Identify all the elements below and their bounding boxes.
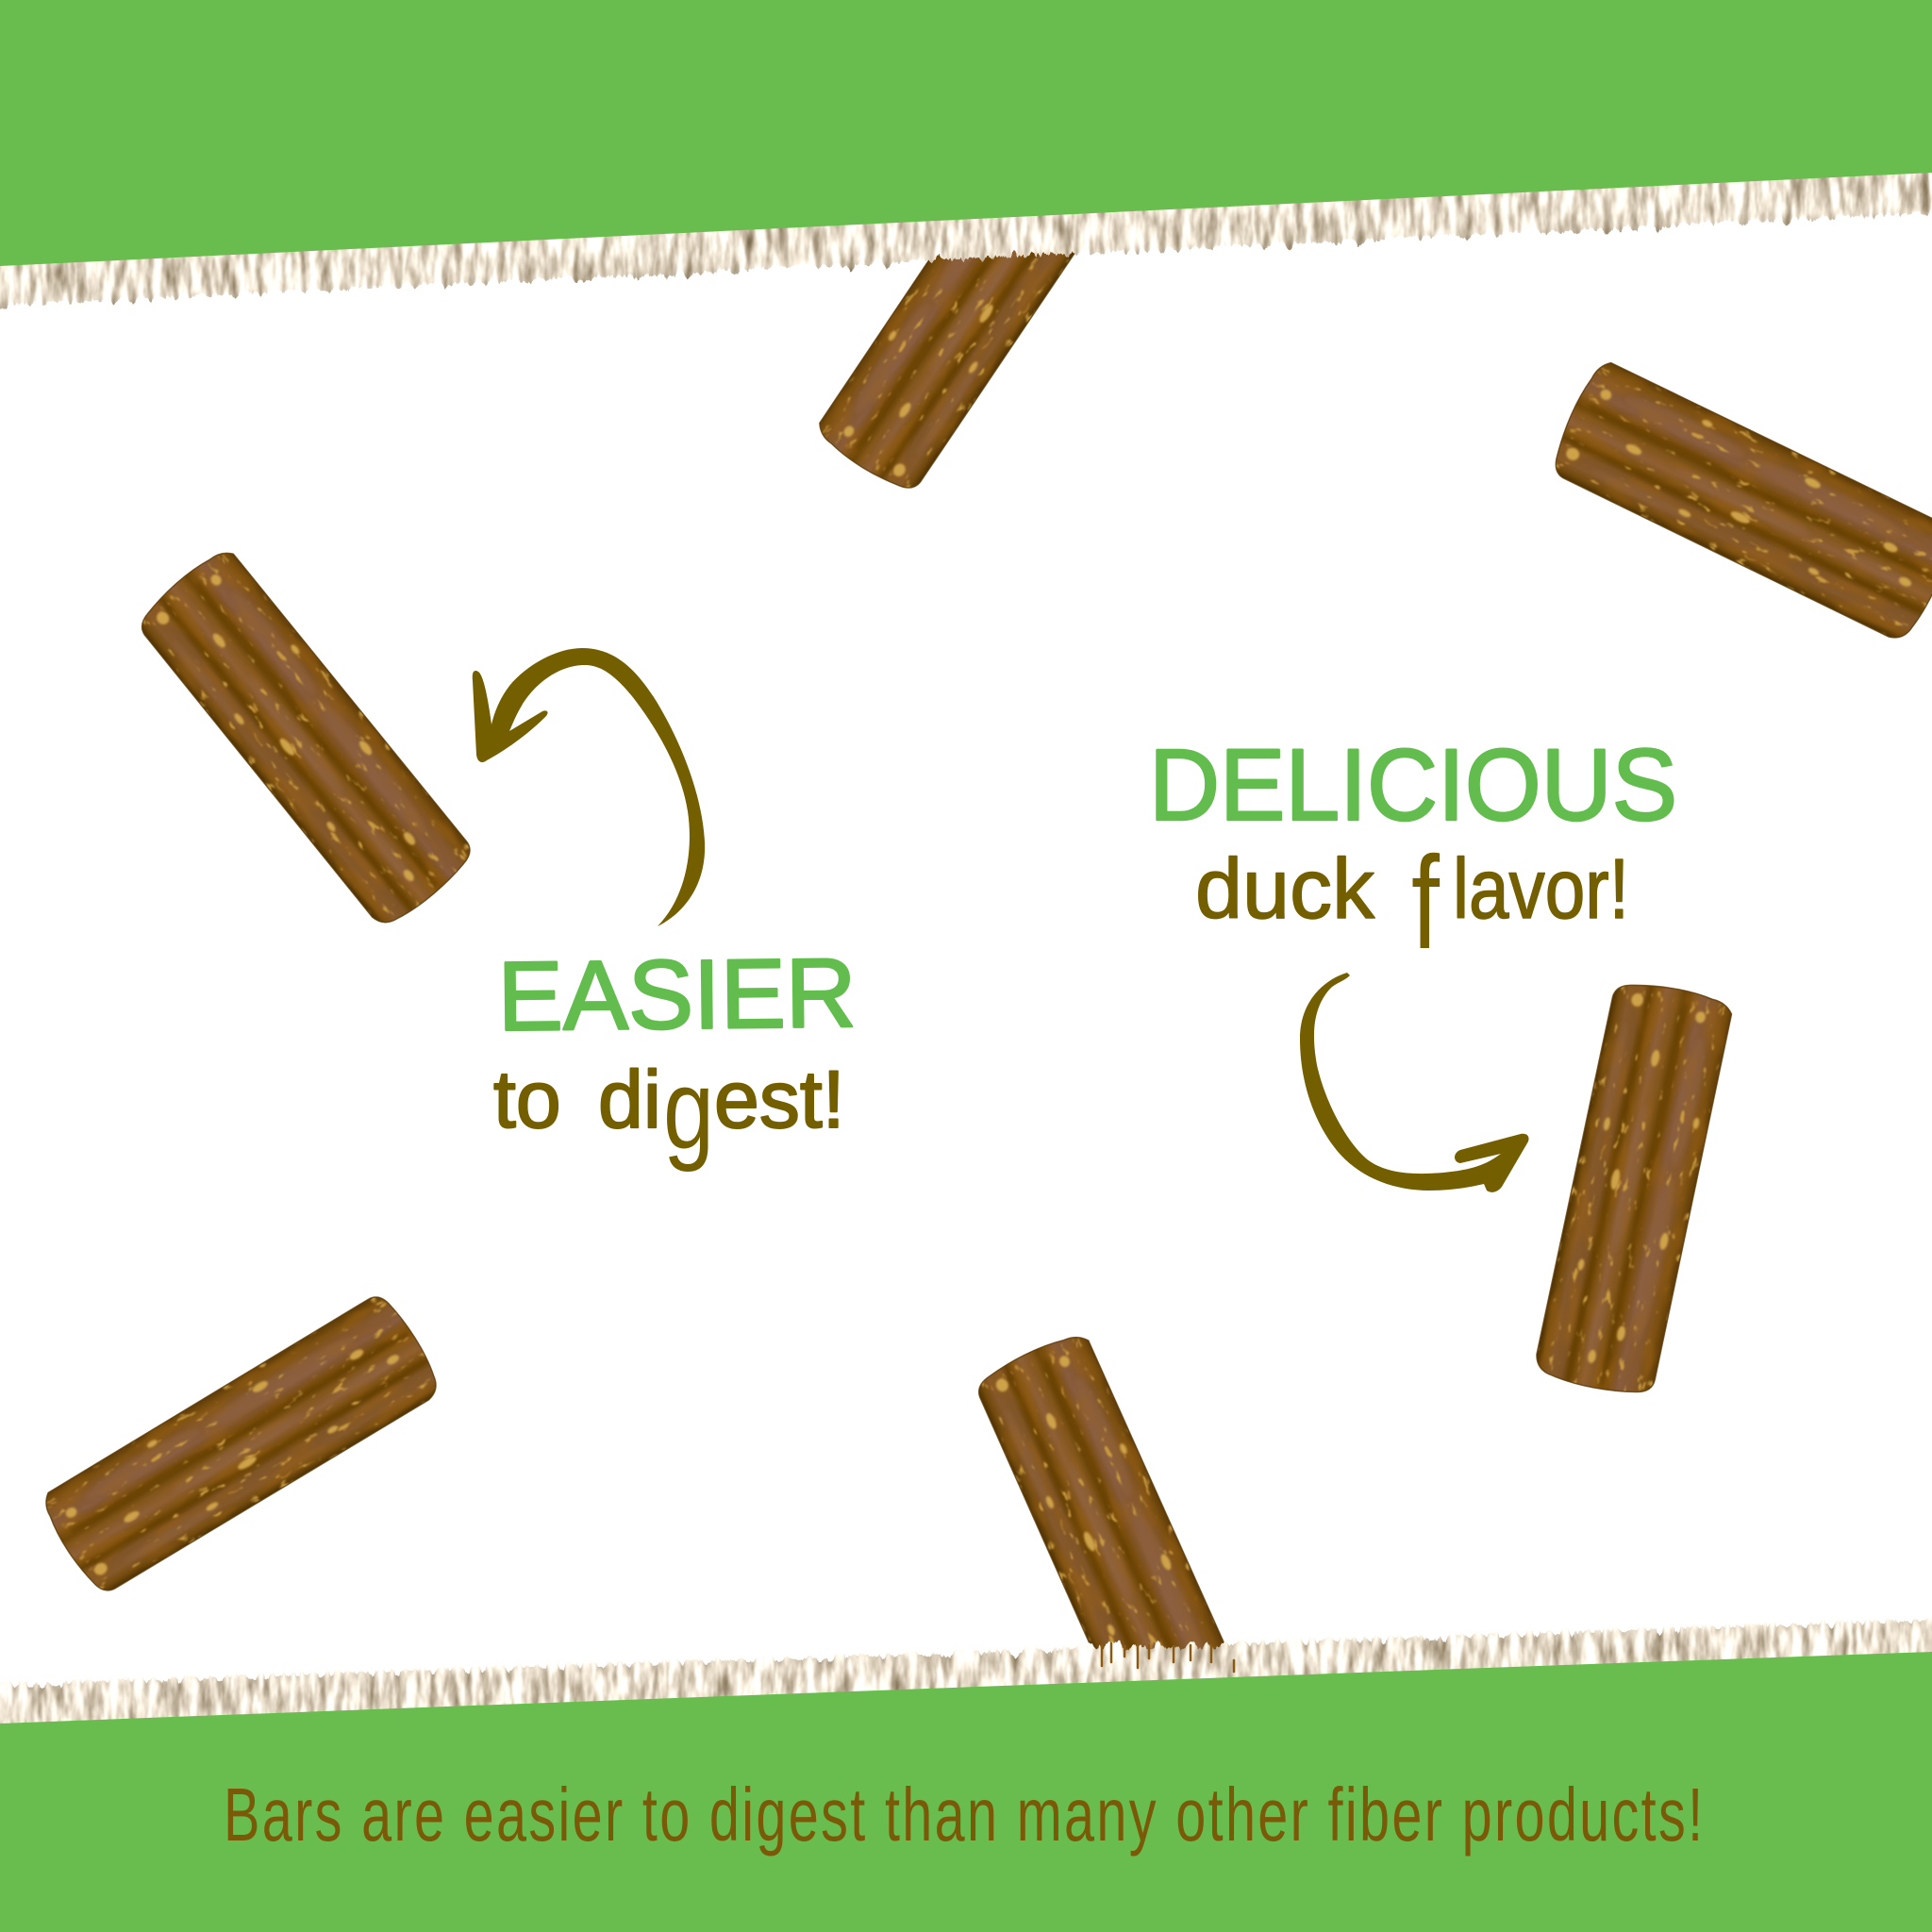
bar: top right [1541, 354, 1932, 648]
callout: easier heading: EASIER [497, 939, 857, 1052]
arrow: curved arrow pointing to left bar [473, 648, 705, 926]
top fringe [0, 161, 1932, 306]
bar: left [128, 540, 482, 937]
footer statement: Bars are easier to digest than many other fiber products! [224, 1773, 1703, 1857]
arrow: curved arrow pointing to right bar [1300, 973, 1529, 1192]
bottom green band [0, 1652, 1932, 1932]
callout: to digest: di [598, 1055, 661, 1145]
top green band [0, 0, 1932, 266]
bar: bottom centre, tucked under fringe [969, 1324, 1251, 1751]
bar drips over bottom fringe [1102, 1643, 1234, 1672]
bar: top centre, tucked under fringe [808, 95, 1138, 503]
callout: to digest: est! [714, 1055, 845, 1145]
bottom fringe [0, 1619, 1932, 1736]
callout: duck flavor: lavor! [1453, 842, 1629, 937]
bar: right [1530, 973, 1737, 1404]
callout: duck flavor: duck [1195, 842, 1375, 937]
callout: duck flavor: f [1411, 828, 1441, 976]
bar: bottom left [33, 1286, 450, 1602]
callout: delicious heading: DELICIOUS [1149, 727, 1677, 841]
callout: to digest: g [663, 1046, 714, 1173]
callout: to digest: to [493, 1055, 561, 1145]
